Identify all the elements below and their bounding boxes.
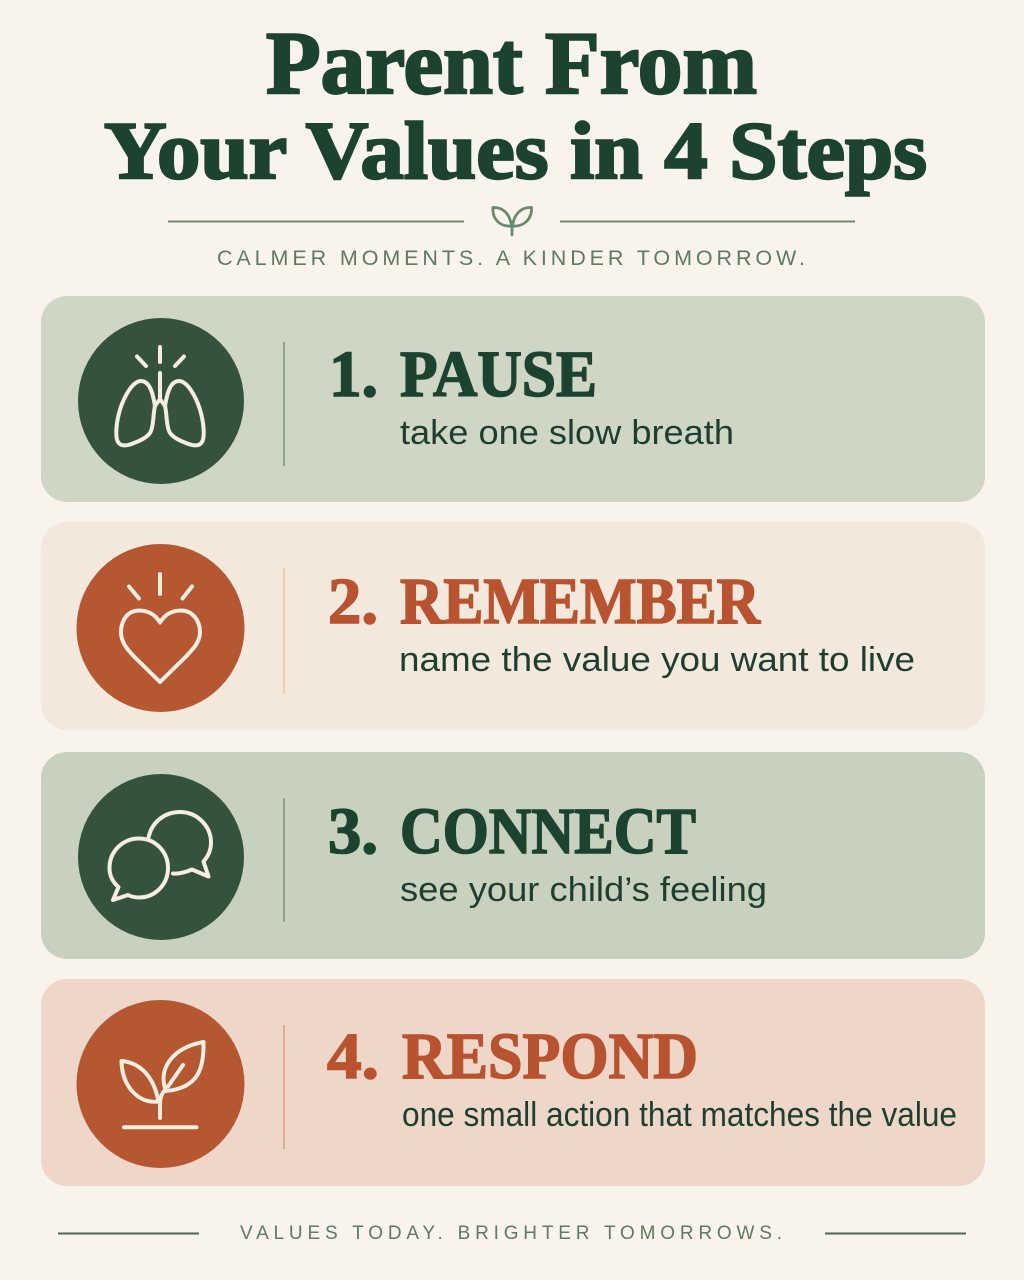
text: respond description: one small action that matches the value — [402, 1096, 957, 1134]
heading: 4. respond: RESPOND — [402, 1020, 698, 1093]
icon: speech bubbles — [78, 774, 244, 940]
heading: 3. connect: CONNECT — [400, 795, 696, 868]
heading: 1. pause: PAUSE — [400, 338, 597, 411]
heading: 2. remember: 2. — [328, 565, 378, 638]
heading: 3. connect: 3. — [328, 795, 378, 868]
panel: step 1 pause — [41, 296, 985, 502]
tagline: CALMER MOMENTS. A KINDER TOMORROW. — [217, 246, 805, 270]
text: remember description: name the value you want to live — [399, 641, 915, 679]
title: Parent From — [266, 15, 757, 113]
panel: step 4 respond — [41, 979, 985, 1186]
icon: lungs — [78, 318, 244, 484]
heading: 1. pause: 1. — [329, 338, 378, 411]
heading: 4. respond: 4. — [327, 1020, 379, 1093]
text: pause description: take one slow breath — [400, 414, 734, 452]
heading: 1. pause — [329, 338, 597, 411]
heading: 2. remember: REMEMBER — [400, 565, 761, 638]
icon: sprout — [76, 1000, 244, 1168]
title — [104, 15, 927, 196]
panel: step 2 remember — [41, 522, 985, 730]
text: connect description: see your child’s feeling — [400, 871, 767, 909]
panel: step 3 connect — [41, 752, 985, 959]
title: Your Values in 4 Steps — [104, 105, 927, 196]
icon: glowing heart — [76, 544, 244, 712]
footer: VALUES TODAY. BRIGHTER TOMORROWS. — [240, 1223, 782, 1244]
header divider with sprout icon — [168, 207, 855, 235]
